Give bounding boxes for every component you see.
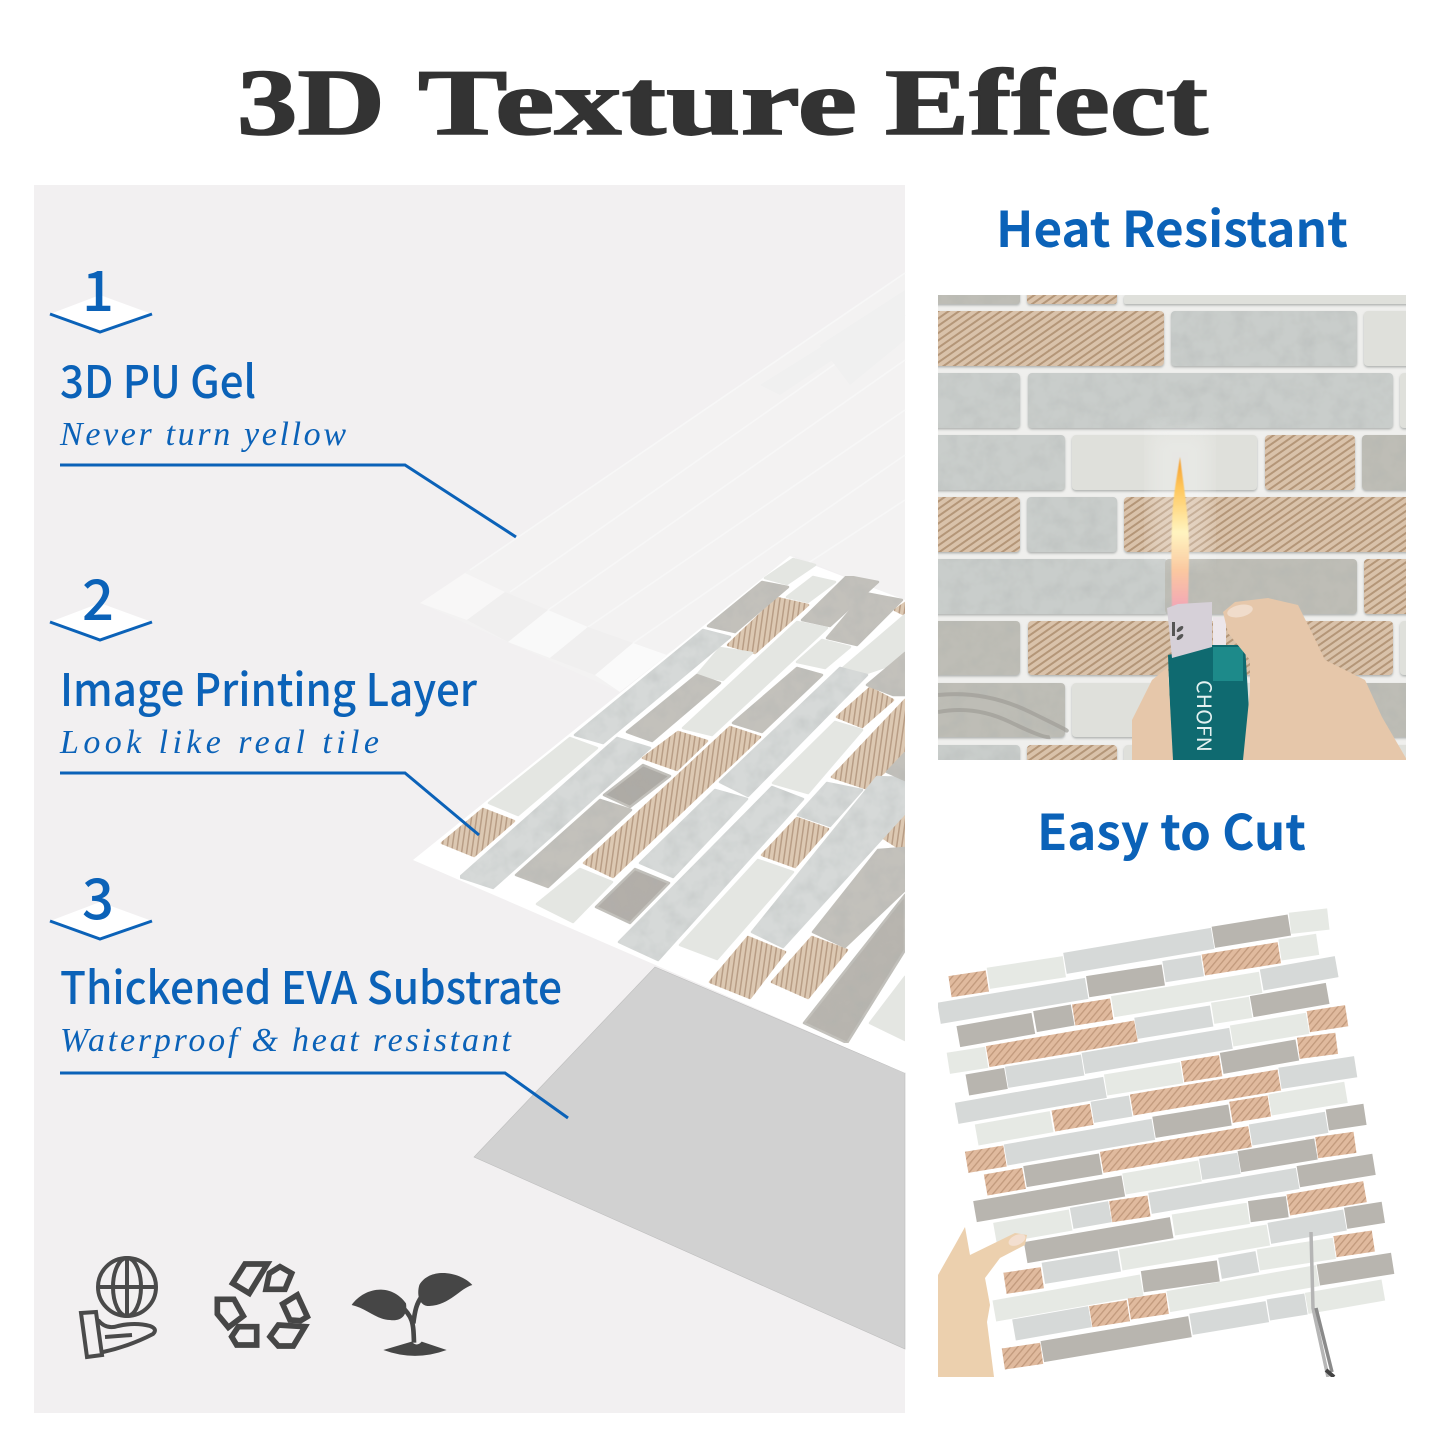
- flame: [1150, 430, 1210, 608]
- subheading: Waterproof & heat resistant: [60, 1022, 513, 1059]
- callout 2: Image Printing Layer: [50, 556, 479, 835]
- photo: cutting tile sheet: [938, 919, 1393, 1377]
- icon: recycle: [217, 1264, 307, 1346]
- tile wall: [938, 295, 1406, 760]
- icon: sprout: [352, 1273, 472, 1356]
- heading: Image Printing Layer: [60, 654, 478, 719]
- tile sheet: [939, 919, 1393, 1359]
- number badge 1: [50, 247, 152, 332]
- title: Effect: [885, 51, 1208, 155]
- callout 1: 3D PU Gel: [50, 247, 516, 537]
- leader line: [60, 465, 516, 537]
- white sheet: [413, 556, 905, 1073]
- photo: lighter flame on tile: [938, 295, 1406, 760]
- wood tiles: [950, 953, 1373, 1359]
- title: [237, 51, 1208, 155]
- panel: layer diagram: [34, 185, 905, 1413]
- grey tiles: [958, 925, 1393, 1352]
- number badge 3: 3: [82, 855, 114, 936]
- icon: globe in hand: [81, 1258, 156, 1357]
- leader line: [60, 773, 479, 835]
- light concrete tiles: [939, 938, 1356, 1330]
- heading: Easy to Cut: Easy to Cut: [1037, 794, 1306, 865]
- number badge 2: 2: [82, 556, 114, 637]
- title: Texture: [418, 51, 857, 155]
- number badge 1: 1: [82, 247, 114, 328]
- subheading: Never turn yellow: [59, 416, 346, 453]
- number badge 2: [50, 556, 152, 640]
- layer: image printing: [413, 556, 905, 1073]
- title: 3D: [237, 51, 385, 155]
- subheading: Look like real tile: [59, 724, 379, 761]
- leader line: [60, 1073, 568, 1118]
- hand holding sheet: [938, 1227, 1027, 1377]
- marble streaks: [938, 694, 1067, 737]
- lighter: [1167, 602, 1252, 760]
- scissors: [1311, 1232, 1334, 1377]
- number badge 3: [50, 855, 152, 939]
- lighter brand: CHOFN: [1191, 680, 1220, 752]
- layer: 3D PU gel (translucent): [420, 273, 905, 692]
- cream tiles: [948, 919, 1383, 1311]
- callout 3: Thickened EVA Substrate: [50, 855, 568, 1118]
- heading: 3D PU Gel: [60, 346, 256, 411]
- printed tiles: [442, 559, 905, 1043]
- heading: Heat Resistant: Heat Resistant: [996, 191, 1348, 262]
- hand holding lighter: [1132, 598, 1407, 760]
- heading: Thickened EVA Substrate: [60, 952, 562, 1017]
- layer: EVA substrate: [474, 967, 905, 1349]
